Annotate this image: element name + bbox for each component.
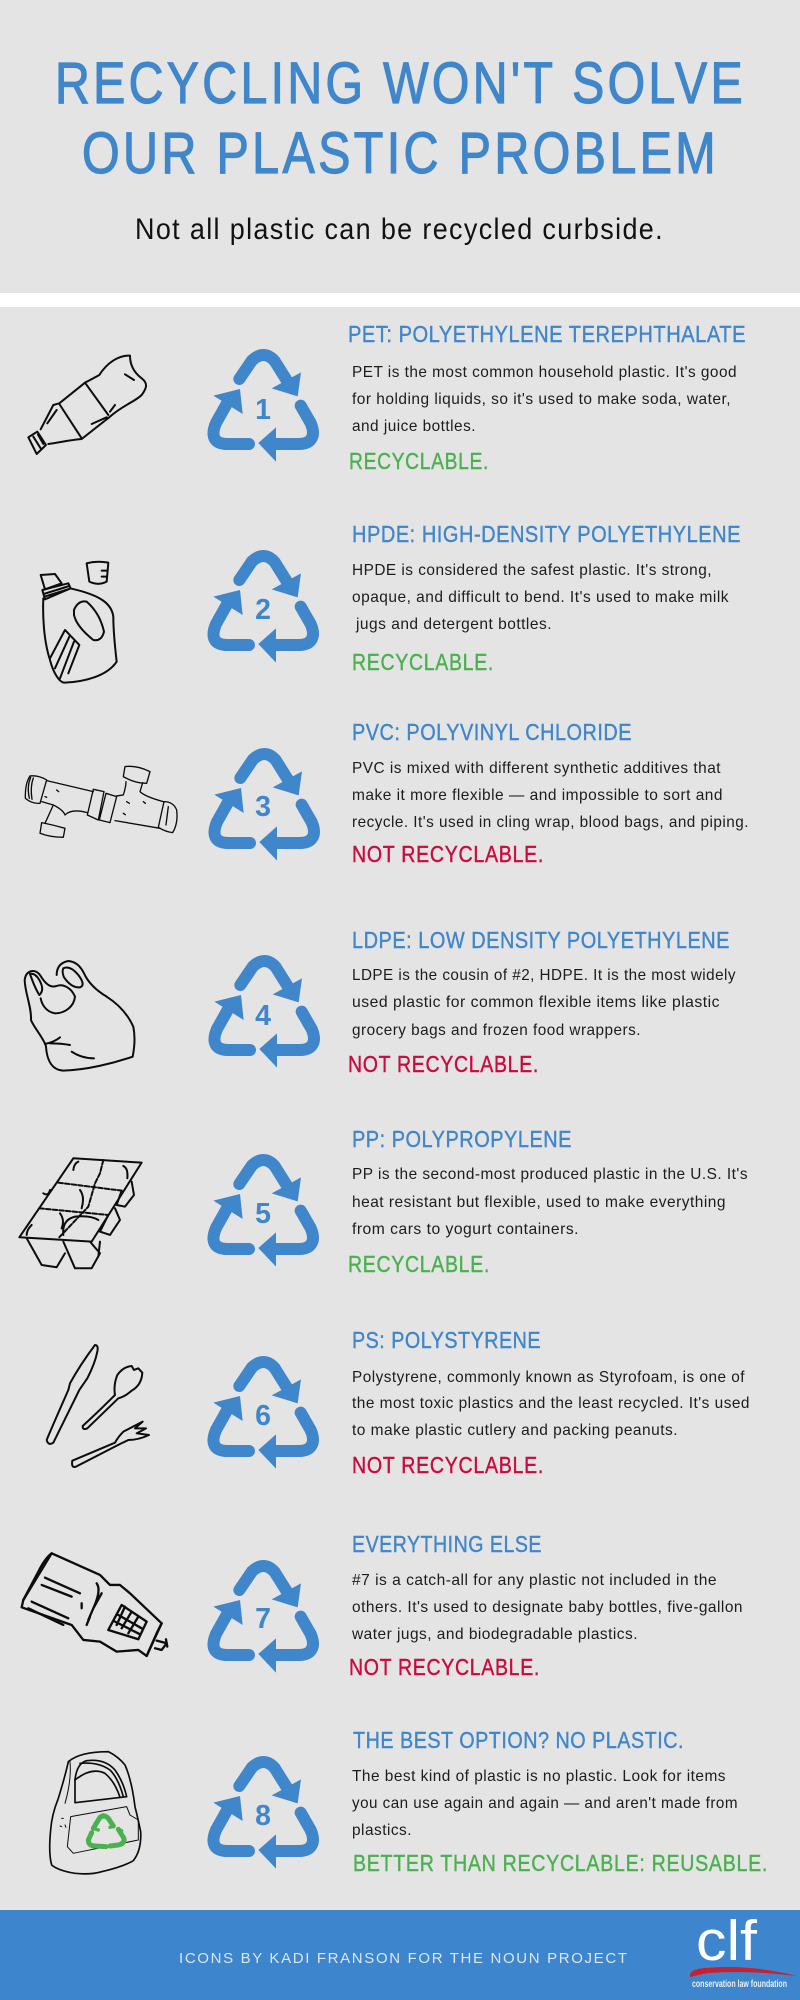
icon: recycling symbol 8 (213, 1762, 313, 1869)
status: not recyclable: NOT RECYCLABLE. (352, 1452, 544, 1478)
body text: others. It's used to designate baby bottles, five-gallon (352, 1599, 743, 1616)
icon: recycling symbol 6 (213, 1362, 313, 1469)
icon: crushed bottle (28, 356, 146, 454)
row 7: everything else (22, 1531, 743, 1680)
icon: baby bottle (22, 1553, 167, 1656)
status: recyclable: RECYCLABLE. (352, 649, 494, 675)
body text (352, 364, 737, 435)
icon credit: ICONS BY KADI FRANSON FOR THE NOUN PROJECT (179, 1950, 627, 1967)
icon: recycling symbol 4 (214, 961, 314, 1068)
status: recyclable: RECYCLABLE. (348, 1251, 490, 1277)
body text: opaque, and difficult to bend. It's used to make milk (352, 589, 729, 606)
icon: plastic cutlery (47, 1345, 149, 1467)
icon: plastic bag (25, 961, 135, 1071)
body text (351, 1572, 743, 1643)
number 4: 4 (255, 1000, 271, 1032)
icon: plastic tray (19, 1158, 142, 1268)
row 8: no plastic (50, 1727, 768, 1876)
row 5: PP (19, 1126, 748, 1277)
body text: from cars to yogurt containers. (352, 1221, 579, 1238)
heading: PET: POLYETHYLENE TEREPHTHALATE (348, 321, 746, 347)
CLF logo: clf (696, 1909, 757, 1973)
body text: HPDE is considered the safest plastic. It's strong, (352, 562, 712, 579)
heading: LDPE: LOW DENSITY POLYETHYLENE (352, 927, 730, 953)
body text: recycle. It's used in cling wrap, blood bags, and piping. (352, 814, 749, 831)
body text: PP is the second-most produced plastic in the U.S. It's (352, 1166, 748, 1183)
icon: recycling symbol 1 (213, 355, 313, 462)
footer band (0, 1909, 800, 2000)
title (55, 51, 746, 186)
body text: jugs and detergent bottles. (355, 616, 552, 633)
number 2: 2 (255, 594, 271, 626)
body text: PET is the most common household plastic. It's good (352, 364, 737, 381)
body text (352, 760, 749, 831)
body text (352, 967, 736, 1039)
status: not recyclable: NOT RECYCLABLE. (352, 841, 544, 867)
row 2: HDPE (41, 521, 741, 683)
status: not recyclable: NOT RECYCLABLE. (348, 1051, 539, 1077)
heading: HPDE: HIGH-DENSITY POLYETHYLENE (352, 521, 741, 547)
icon: recycling symbol 3 (214, 754, 314, 861)
heading: PVC: POLYVINYL CHLORIDE (352, 719, 632, 745)
body text: #7 is a catch-all for any plastic not included in the (352, 1572, 717, 1589)
header panel (0, 0, 800, 293)
body text (352, 1166, 748, 1238)
icon: green recycling mark (88, 1816, 124, 1847)
body text: The best kind of plastic is no plastic. Look for items (352, 1768, 726, 1785)
number 1: 1 (255, 394, 271, 426)
heading: PP: POLYPROPYLENE (352, 1126, 572, 1152)
body text: you can use again and again — and aren't made from (352, 1795, 738, 1812)
row 4: LDPE (25, 927, 736, 1077)
icon: reusable bag (50, 1752, 141, 1874)
body text (352, 562, 729, 633)
body text: Polystyrene, commonly known as Styrofoam, is one of (352, 1369, 745, 1386)
body text: the most toxic plastics and the least recycled. It's used (352, 1395, 750, 1412)
row 6: PS (47, 1327, 750, 1478)
subtitle: Not all plastic can be recycled curbside. (135, 213, 664, 246)
heading: THE BEST OPTION? NO PLASTIC. (353, 1727, 684, 1753)
icon: recycling symbol 5 (213, 1160, 313, 1267)
status: not recyclable: NOT RECYCLABLE. (349, 1654, 540, 1680)
body text: used plastic for common flexible items like plastic (352, 994, 720, 1011)
number 5: 5 (255, 1198, 271, 1230)
body text: heat resistant but flexible, used to make everything (352, 1194, 726, 1211)
body text (352, 1768, 738, 1839)
body text: and juice bottles. (352, 418, 476, 435)
row 1: PET (28, 321, 746, 474)
icon: recycling symbol 2 (213, 556, 313, 663)
body text: make it more flexible — and impossible to sort and (352, 787, 723, 804)
icon: detergent jug (41, 562, 117, 683)
number 3: 3 (255, 791, 271, 823)
body text: for holding liquids, so it's used to make soda, water, (352, 391, 731, 408)
body text: PVC is mixed with different synthetic additives that (352, 760, 721, 777)
number 7: 7 (255, 1603, 271, 1635)
number 6: 6 (255, 1400, 271, 1432)
CLF logo (690, 1909, 797, 1990)
icon: PVC pipe (25, 766, 177, 837)
row 3: PVC (25, 719, 749, 867)
body text: LDPE is the cousin of #2, HDPE. It is the most widely (352, 967, 736, 984)
number 8: 8 (255, 1800, 271, 1832)
body text: water jugs, and biodegradable plastics. (351, 1626, 638, 1643)
body text: grocery bags and frozen food wrappers. (352, 1022, 641, 1039)
status: recyclable: RECYCLABLE. (349, 448, 489, 474)
body text: to make plastic cutlery and packing peanuts. (352, 1422, 678, 1439)
body text (352, 1369, 750, 1439)
heading: EVERYTHING ELSE (352, 1531, 542, 1557)
icon: recycling symbol 7 (213, 1566, 313, 1673)
heading: PS: POLYSTYRENE (352, 1327, 541, 1353)
body text: plastics. (352, 1822, 412, 1839)
